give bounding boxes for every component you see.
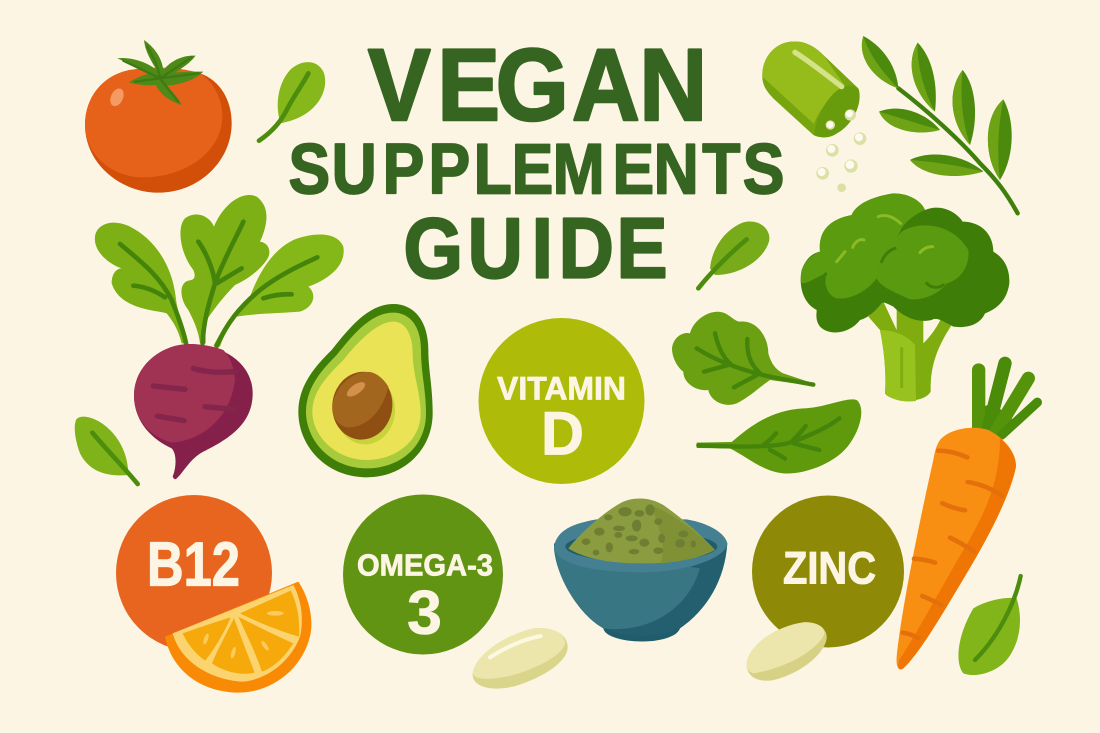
icon: small leaf bottom right — [958, 576, 1021, 675]
badge: Vitamin D: VITAMIN — [497, 370, 626, 406]
icon: tomato — [85, 40, 232, 193]
icon: capsule with powder — [762, 42, 866, 192]
icon: small leaf near title — [259, 62, 325, 141]
icon: small leaf left of beet — [75, 417, 138, 484]
badge: Omega-3: OMEGA-3 — [357, 548, 493, 582]
icon: beet with leaves — [95, 195, 344, 479]
icon: avocado — [298, 304, 433, 477]
icon: tablet pill — [747, 622, 827, 681]
icon: broccoli — [801, 193, 1009, 401]
badge: Vitamin D — [478, 318, 644, 484]
icon: bowl of green powder — [554, 498, 727, 641]
badge: Omega-3: 3 — [407, 579, 442, 648]
badge: Vitamin D: D — [541, 400, 584, 468]
badge: B12: B12 — [147, 530, 240, 600]
badge: Zinc: ZINC — [783, 542, 876, 594]
badge: B12 — [116, 495, 272, 651]
title: GUIDE — [404, 202, 668, 296]
icon: spinach leaf — [697, 399, 861, 473]
title: VEGAN — [368, 27, 707, 142]
icon: carrot — [897, 363, 1037, 669]
icon: orange slice — [165, 582, 311, 693]
icon: small leaf by GUIDE — [698, 222, 769, 288]
badge: Zinc — [752, 496, 904, 648]
icon: lobed spinach leaf — [672, 312, 815, 405]
icon: softgel pill — [473, 628, 568, 689]
title: SUPPLEMENTS — [288, 130, 784, 209]
badge: Omega-3 — [343, 494, 503, 654]
title — [288, 27, 784, 296]
icon: herb sprig — [862, 36, 1018, 213]
